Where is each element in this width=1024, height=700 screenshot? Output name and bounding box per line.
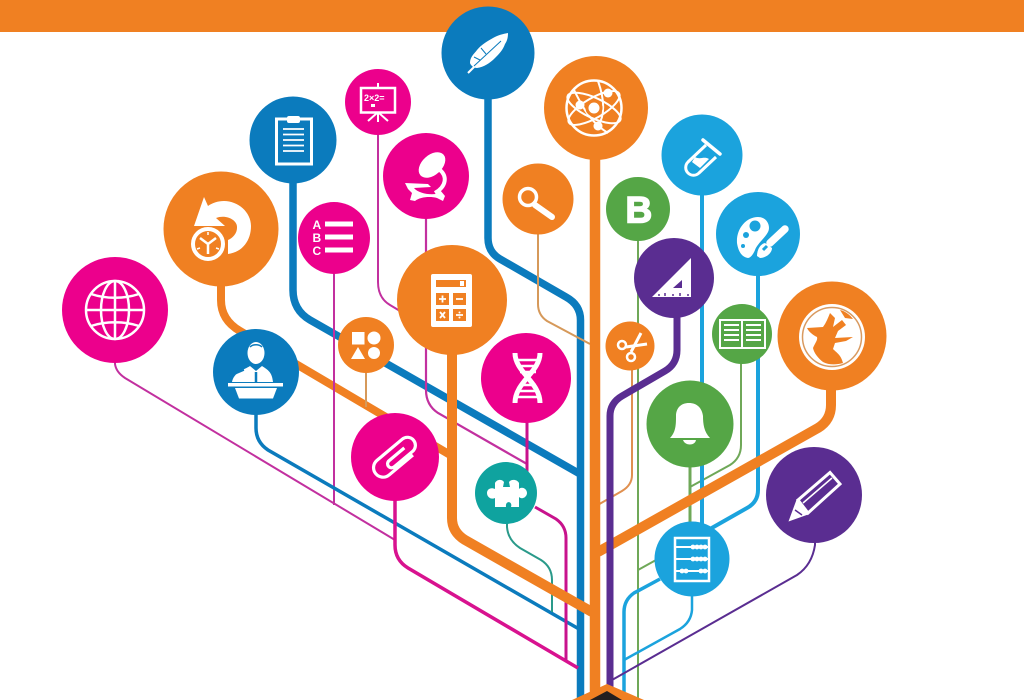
tree branches bbox=[115, 95, 831, 700]
branch: microscope bbox=[426, 215, 527, 464]
branch: ABC list bbox=[333, 270, 335, 505]
node: ruler bbox=[634, 238, 714, 318]
icon: chalkboard: 2×2= bbox=[364, 93, 385, 103]
icon: paperclip bbox=[370, 434, 421, 481]
branch: magnifier bbox=[538, 230, 590, 344]
icon: DNA helix bbox=[515, 353, 540, 403]
icon: letter B: B bbox=[626, 190, 652, 230]
branch: earth bbox=[598, 385, 831, 552]
root chevron bbox=[572, 684, 644, 700]
branch: test tube bbox=[700, 190, 704, 530]
icon: clipboard bbox=[276, 116, 312, 164]
icon: test tube bbox=[686, 140, 720, 175]
node: paperclip bbox=[351, 413, 439, 501]
node: clipboard bbox=[250, 96, 336, 184]
node: undo clock bbox=[164, 172, 278, 286]
node: palette bbox=[716, 192, 800, 276]
branch: shapes bbox=[365, 370, 367, 407]
icon: earth bbox=[799, 304, 865, 370]
branch: globe bbox=[115, 360, 395, 540]
node: magnifier bbox=[502, 164, 574, 234]
icon: scissors bbox=[618, 333, 647, 361]
icon: palette bbox=[737, 217, 785, 258]
branch: abacus lower bbox=[624, 592, 692, 660]
branch: calculator bbox=[452, 350, 592, 612]
branch: atom trunk bbox=[590, 155, 600, 700]
icon: undo clock bbox=[190, 197, 251, 262]
node: bell bbox=[646, 380, 734, 468]
node: presenter bbox=[213, 329, 299, 415]
icon: microscope bbox=[405, 147, 450, 201]
node: ABC list bbox=[298, 202, 370, 274]
branch: ruler bbox=[610, 315, 677, 692]
icon: shapes bbox=[351, 332, 380, 359]
node: globe bbox=[62, 257, 168, 363]
node: shapes bbox=[338, 317, 394, 373]
branch: feather bbox=[488, 95, 580, 700]
node: scissors bbox=[606, 322, 654, 370]
node: feather bbox=[442, 6, 534, 100]
node: microscope bbox=[383, 133, 469, 219]
branch: presenter bbox=[256, 410, 579, 629]
icon: magnifier bbox=[520, 188, 552, 217]
branch: palette bbox=[710, 272, 758, 529]
icon: pencil bbox=[791, 472, 840, 519]
icon: atom bbox=[563, 80, 625, 136]
branch: clipboard bbox=[293, 180, 580, 474]
icon: puzzle piece bbox=[487, 480, 527, 507]
branch: chalkboard bbox=[378, 130, 400, 311]
branch: book bbox=[690, 360, 741, 487]
icon: calculator bbox=[431, 274, 472, 327]
icon: bell bbox=[670, 403, 710, 444]
node: puzzle bbox=[475, 462, 537, 524]
icon: abacus bbox=[675, 538, 709, 581]
branch: abacus green bbox=[638, 560, 656, 570]
branch: B green bbox=[637, 238, 639, 700]
icon: presenter bbox=[228, 342, 283, 398]
icon: feather bbox=[468, 33, 508, 73]
node: book bbox=[712, 304, 772, 364]
top orange banner bbox=[0, 0, 1024, 32]
icon: ABC list: C bbox=[312, 244, 322, 258]
icon: set square bbox=[652, 258, 691, 297]
icon: ABC list: B bbox=[312, 231, 322, 245]
node: test tube bbox=[662, 114, 742, 196]
icon: ABC list: A bbox=[312, 218, 322, 232]
node: earth bbox=[778, 282, 886, 390]
node: abacus bbox=[654, 522, 730, 596]
icon: open book bbox=[720, 320, 765, 348]
node: calculator bbox=[397, 245, 507, 355]
branch: undo clock bbox=[221, 280, 452, 456]
branch: pencil bbox=[612, 540, 815, 680]
branch: puzzle teal bbox=[507, 520, 552, 612]
branch: DNA bbox=[526, 420, 528, 472]
node: pencil bbox=[766, 447, 862, 543]
icon: wire globe bbox=[86, 281, 144, 339]
branch: paperclip bbox=[395, 495, 578, 668]
icon: ABC list bbox=[312, 218, 353, 258]
node: atom bbox=[544, 56, 648, 160]
branch: bell bbox=[688, 465, 692, 528]
node: chalkboard bbox=[345, 69, 411, 135]
branch: abacus lower left bbox=[624, 579, 660, 700]
branch: scissors bbox=[596, 368, 632, 506]
node: DNA bbox=[481, 333, 571, 423]
branch: puzzle magenta bbox=[535, 507, 566, 660]
node: letter B bbox=[606, 177, 670, 241]
